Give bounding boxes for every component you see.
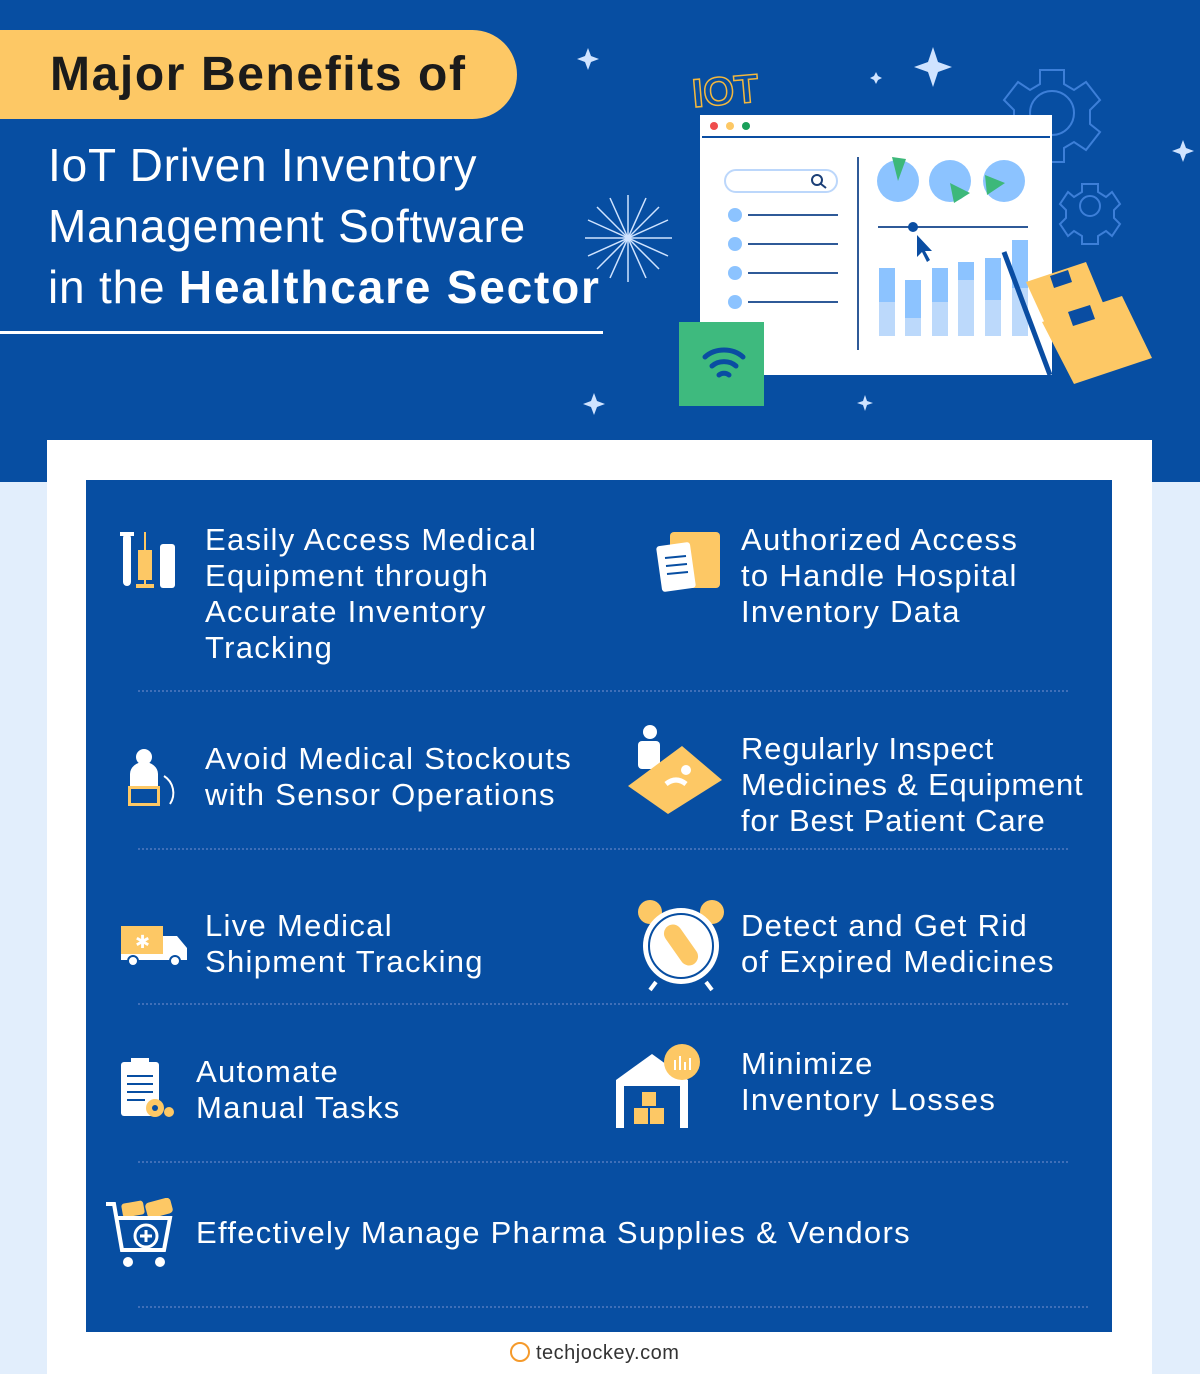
text: benefit 3: Avoid Medical Stockouts bbox=[205, 741, 572, 776]
subtitle bbox=[48, 139, 601, 313]
text: benefit 1: Equipment through bbox=[205, 558, 489, 593]
text: benefit 3: with Sensor Operations bbox=[205, 777, 556, 812]
text: benefit 2: Authorized Access bbox=[741, 522, 1018, 557]
text: benefit 8: Inventory Losses bbox=[741, 1082, 996, 1117]
panel: benefits bbox=[86, 480, 1112, 1332]
icon: checklist gear bbox=[121, 1058, 174, 1117]
icon: truck bbox=[121, 926, 187, 965]
icon: pharma cart bbox=[106, 1198, 173, 1267]
icon: medical equipment bbox=[120, 532, 175, 588]
text: benefit 4: for Best Patient Care bbox=[741, 803, 1046, 838]
header background bbox=[0, 0, 1200, 482]
subtitle: Management Software bbox=[48, 200, 526, 252]
text: benefit 7: Manual Tasks bbox=[196, 1090, 401, 1125]
footer logo: techjockey.com bbox=[536, 1342, 679, 1364]
text: benefit 4: Regularly Inspect bbox=[741, 731, 994, 766]
text: benefit 1: Easily Access Medical bbox=[205, 522, 537, 557]
illustration: dashboard: IOT bbox=[690, 67, 761, 116]
text: benefit 1: Accurate Inventory bbox=[205, 594, 487, 629]
title pill bbox=[0, 30, 517, 119]
text: benefit 1 bbox=[205, 522, 537, 665]
text: benefit 4: Medicines & Equipment bbox=[741, 767, 1083, 802]
white frame bbox=[47, 440, 1152, 1374]
text: benefit 4 bbox=[741, 731, 1083, 838]
text: benefit 8 bbox=[741, 1046, 996, 1117]
text: benefit 2: to Handle Hospital bbox=[741, 558, 1018, 593]
underline bbox=[0, 331, 603, 334]
text: benefit 5 bbox=[205, 908, 484, 979]
icon: alarm clock pill bbox=[638, 900, 724, 992]
icon: patient bed bbox=[628, 725, 722, 814]
text: benefit 2: Inventory Data bbox=[741, 594, 961, 629]
subtitle: in the Healthcare Sector bbox=[48, 261, 601, 313]
icon: truck: ✱ bbox=[135, 932, 150, 952]
title pill: Major Benefits of bbox=[50, 48, 467, 101]
text: benefit 5: Shipment Tracking bbox=[205, 944, 484, 979]
subtitle: IoT Driven Inventory bbox=[48, 139, 477, 191]
text: benefit 7: Automate bbox=[196, 1054, 339, 1089]
text: benefit 6: Detect and Get Rid bbox=[741, 908, 1028, 943]
text: benefit 7 bbox=[196, 1054, 401, 1125]
icon: warehouse bbox=[616, 1044, 700, 1128]
text: benefit 9: Effectively Manage Pharma Supplies & Vendors bbox=[196, 1215, 911, 1250]
illustration: dashboard bbox=[577, 47, 1194, 415]
text: benefit 8: Minimize bbox=[741, 1046, 874, 1081]
icon: sensor operator bbox=[128, 749, 174, 806]
icon: clipboard box bbox=[656, 532, 720, 592]
text: benefit 2 bbox=[741, 522, 1018, 629]
text: benefit 6 bbox=[741, 908, 1055, 979]
text: benefit 3 bbox=[205, 741, 572, 812]
text: benefit 5: Live Medical bbox=[205, 908, 393, 943]
text: benefit 1: Tracking bbox=[205, 630, 333, 665]
text: benefit 6: of Expired Medicines bbox=[741, 944, 1055, 979]
